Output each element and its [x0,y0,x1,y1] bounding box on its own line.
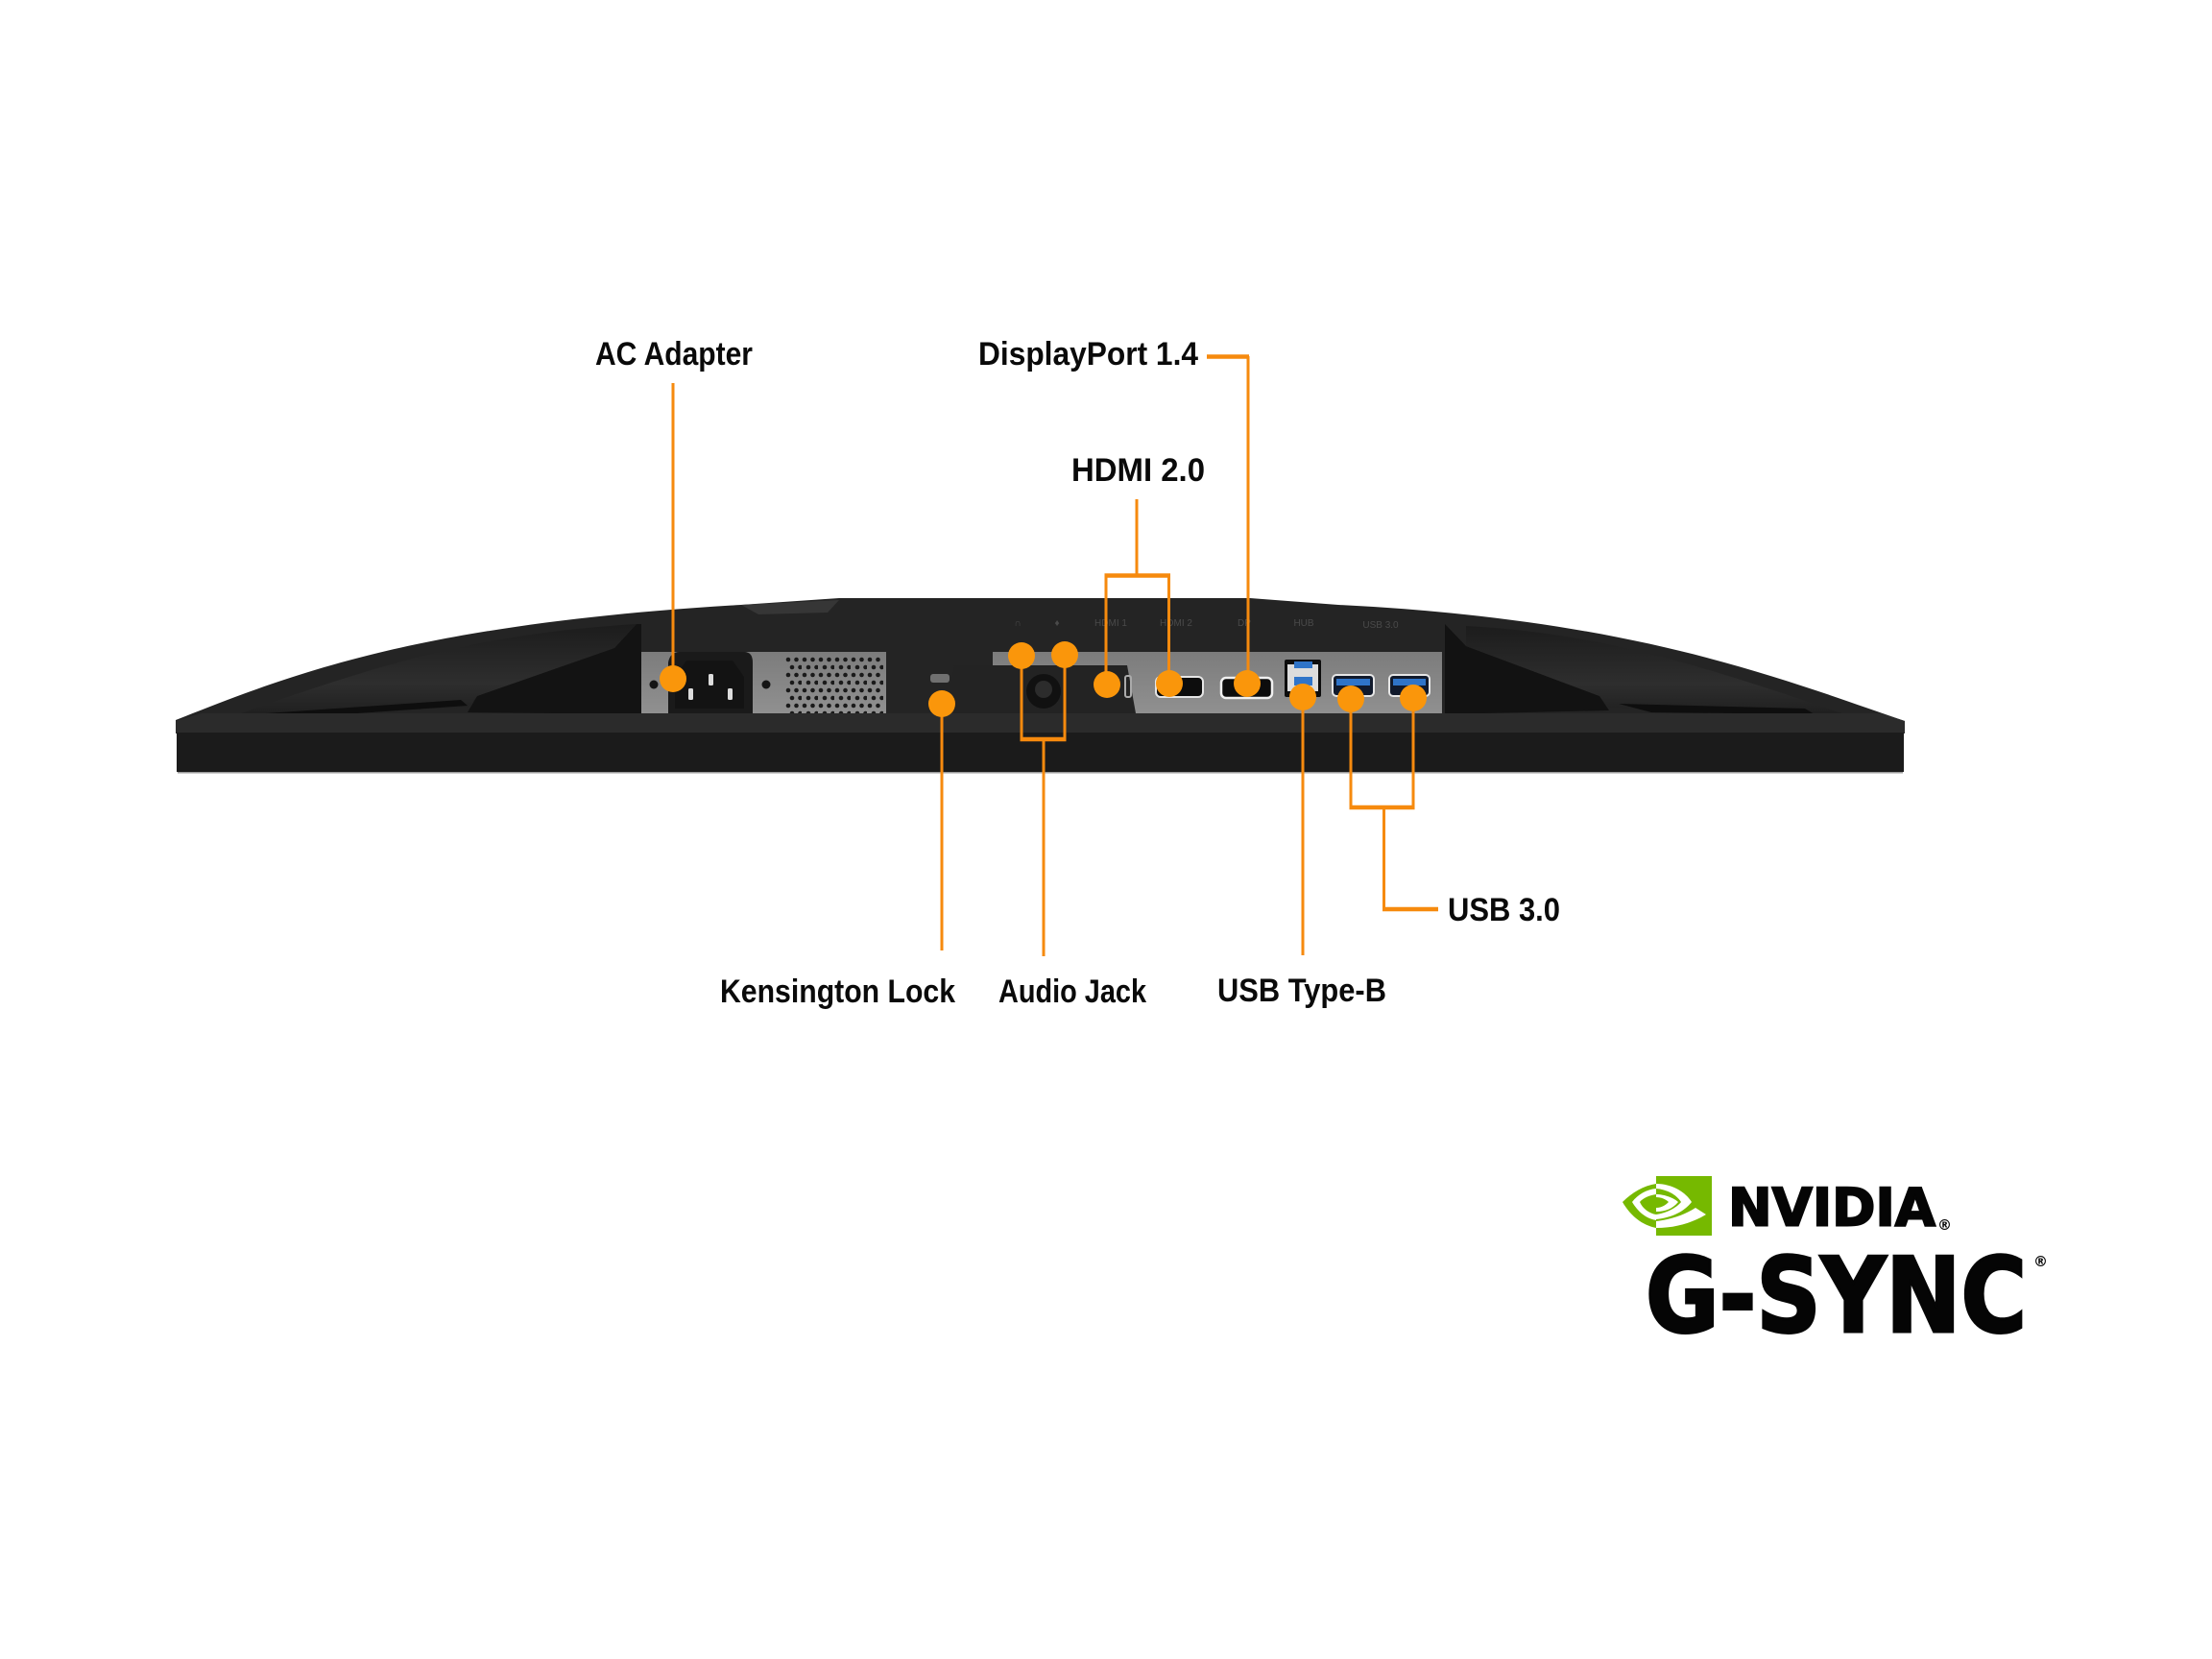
audio joystick [1026,674,1061,709]
registered mark: ® [1937,1216,1952,1234]
label: USB Type-B [1217,973,1386,1009]
callout: AC Adapter [595,336,753,692]
icon: NVIDIA eye [1623,1176,1712,1236]
IO panel [930,652,1442,713]
grey plate [641,652,886,713]
leader line [1302,697,1304,955]
leader line [672,383,674,679]
wordmark: G-SYNC: G-SYNC [1646,1237,2027,1357]
label: HDMI 2.0 [1071,452,1205,489]
silkscreen labels: ♦ [1054,618,1060,629]
front bezel [177,733,1904,772]
marker HDMI 2 [1156,670,1183,697]
leader bracket [1351,698,1413,909]
socket pins [709,674,713,685]
USB 3.0 port 1 [1333,675,1374,696]
logo: NVIDIA G-SYNC [1623,1176,2048,1357]
marker HDMI 1 [1094,671,1120,698]
left vent slot [266,700,468,713]
registered mark: ® [2033,1253,2048,1270]
HDMI 2 port [1156,677,1203,697]
front ledge [176,713,1905,733]
silkscreen labels: HDMI 2 [1160,618,1192,629]
top trapezoid highlight [741,600,839,614]
right vent slot [1619,704,1815,714]
monitor underside photo [176,598,1905,774]
label: AC Adapter [595,336,753,373]
leader bracket [1106,499,1169,685]
marker mic [1051,641,1078,668]
wordmark: NVIDIA: NVIDIA [1728,1177,1936,1238]
monitor rear shell [176,598,1905,733]
USB-B port [1285,660,1321,697]
screw holes [649,680,659,689]
DisplayPort port [1221,678,1272,698]
right fin [1466,626,1848,715]
stand neck overlay [946,665,1136,713]
right recess [1445,624,1609,714]
leader line [941,704,943,950]
bracket bar [1350,807,1438,909]
bezel shadow edge [178,772,1903,774]
marker [1234,670,1261,697]
marker [1289,684,1316,710]
callout: DisplayPort 1.4 [978,336,1261,697]
Kensington slot [930,674,950,683]
silkscreen labels [1014,618,1399,631]
marker [928,690,955,717]
callout: Kensington Lock [720,690,955,1010]
callout: USB 3.0 [1337,685,1560,928]
marker headphone [1008,642,1035,669]
silkscreen labels: HDMI 1 [1094,618,1127,629]
label: DisplayPort 1.4 [978,336,1198,373]
label: Kensington Lock [720,974,955,1010]
HDMI 1 edge [1125,676,1131,697]
bracket bar [1020,737,1066,741]
callout: HDMI 2.0 [1071,452,1205,698]
label: USB 3.0 [1448,892,1560,928]
grey IO plate [993,652,1442,713]
marker port 2 [1400,685,1427,711]
vent holes [785,657,883,713]
leader stub [1207,354,1249,359]
callout: USB Type-B [1217,684,1386,1009]
marker [660,665,686,692]
silkscreen labels: ∩ [1014,618,1022,629]
AC socket [668,652,753,713]
USB 3.0 port 2 [1389,675,1430,696]
silkscreen labels: HUB [1293,618,1314,629]
callout: Audio Jack [998,641,1146,1010]
marker port 1 [1337,685,1364,712]
leader line [1246,356,1250,684]
bracket bar [1104,573,1170,578]
silkscreen labels: USB 3.0 [1362,620,1399,631]
silkscreen labels: DP [1238,618,1251,629]
power panel [641,652,886,713]
left fin [235,624,637,715]
leader bracket [1022,655,1065,956]
left recess [468,624,641,714]
label: Audio Jack [998,974,1146,1010]
